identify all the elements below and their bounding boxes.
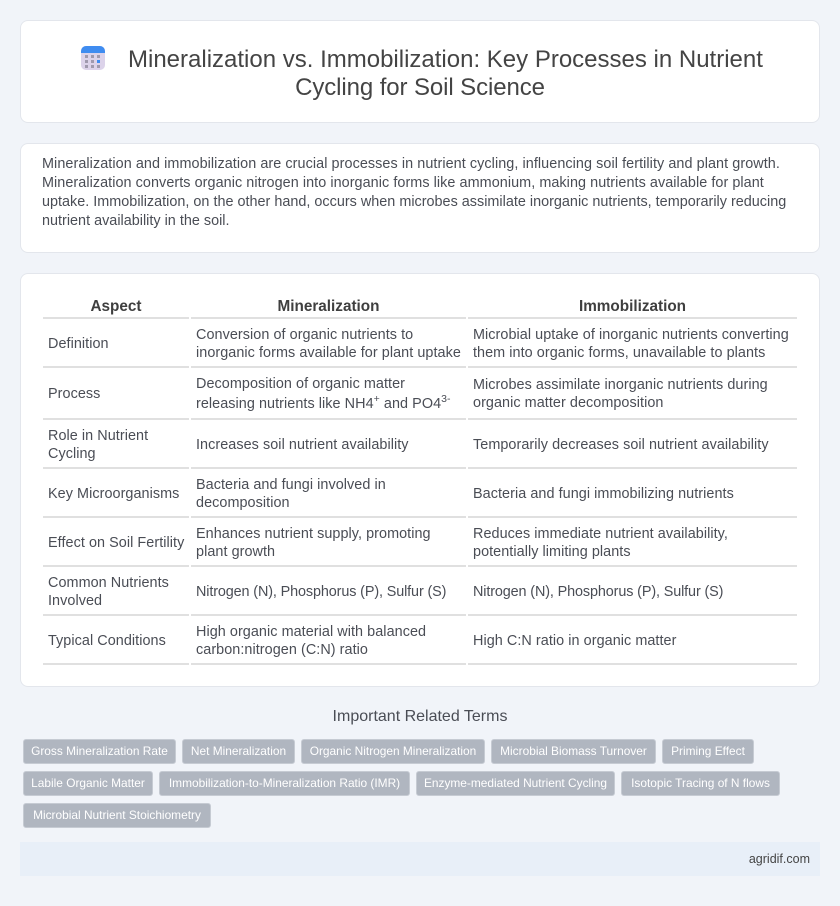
row: Typical Conditions xyxy=(48,624,676,658)
title xyxy=(128,46,763,101)
comparison table xyxy=(43,298,797,665)
row: Typical Conditions: carbon:nitrogen (C:N) ratio xyxy=(196,642,368,658)
row: Common Nutrients Involved: Nitrogen (N), Phosphorus (P), Sulfur (S) xyxy=(196,584,446,600)
text block: intro: Mineralization converts organic nitrogen into inorganic forms like ammonium, making nutrients available for plant xyxy=(42,175,764,191)
row: Key Microorganisms xyxy=(48,477,734,511)
text block: intro: Mineralization and immobilization are crucial processes in nutrient cycling, influencing soil fertility and plant growth. xyxy=(42,156,780,172)
tag list: related terms: Organic Nitrogen Mineralization xyxy=(310,744,476,758)
footer bar xyxy=(20,842,820,876)
row: Process: Decomposition of organic matter xyxy=(196,376,405,392)
tag list: related terms: Labile Organic Matter xyxy=(31,776,145,790)
row: Key Microorganisms: Bacteria and fungi immobilizing nutrients xyxy=(473,486,734,502)
row: Definition: Microbial uptake of inorganic nutrients converting xyxy=(473,327,789,343)
panel: intro description xyxy=(20,143,820,253)
tag list: related terms: Microbial Biomass Turnover xyxy=(500,744,647,758)
row: Effect on Soil Fertility: Enhances nutrient supply, promoting xyxy=(196,526,431,542)
tag list: related terms xyxy=(23,739,780,828)
row: Common Nutrients Involved: Common Nutrients xyxy=(48,575,169,591)
row: Definition xyxy=(48,327,789,361)
row: Common Nutrients Involved xyxy=(48,575,723,609)
row: Effect on Soil Fertility: plant growth xyxy=(196,544,275,560)
row: Effect on Soil Fertility: Reduces immediate nutrient availability, xyxy=(473,526,728,542)
row: Role in Nutrient Cycling xyxy=(48,428,769,462)
footer credit: agridif.com xyxy=(749,852,810,866)
row: Process: organic matter decomposition xyxy=(473,395,663,411)
text block: intro: uptake. Immobilization, on the other hand, occurs when microbes assimilate inorganic nutrients, temporarily reducing xyxy=(42,194,786,210)
row: Key Microorganisms: Bacteria and fungi involved in xyxy=(196,477,386,493)
tag list: related terms: Microbial Nutrient Stoichiometry xyxy=(33,808,201,822)
title: Mineralization vs. Immobilization: Key Processes in Nutrient xyxy=(128,46,763,73)
panel: comparison table card xyxy=(20,273,820,687)
title: Cycling for Soil Science xyxy=(295,74,545,101)
row: Process: Process xyxy=(48,386,100,402)
row: Process: releasing nutrients like NH4+ and PO43- xyxy=(196,393,451,412)
heading: related terms: Important Related Terms xyxy=(333,708,507,725)
tag list: related terms: Priming Effect xyxy=(671,744,745,758)
row: Effect on Soil Fertility: Effect on Soil Fertility xyxy=(48,535,184,551)
row: Common Nutrients Involved: Nitrogen (N), Phosphorus (P), Sulfur (S) xyxy=(473,584,723,600)
row: Typical Conditions: Typical Conditions xyxy=(48,633,166,649)
row: Key Microorganisms: decomposition xyxy=(196,495,290,511)
column heading: Mineralization: Mineralization xyxy=(278,298,380,315)
row: Definition: Definition xyxy=(48,336,109,352)
text block: intro xyxy=(42,156,786,229)
row: Definition: them into organic forms, unavailable to plants xyxy=(473,345,765,361)
row: Key Microorganisms: Key Microorganisms xyxy=(48,486,179,502)
row: Effect on Soil Fertility xyxy=(48,526,728,560)
icon: calendar grid xyxy=(81,46,105,70)
column heading: Aspect: Aspect xyxy=(90,298,142,315)
panel: header card xyxy=(20,20,820,123)
row: Process xyxy=(48,376,768,412)
tag list: related terms: Gross Mineralization Rate xyxy=(31,744,168,758)
row: Role in Nutrient Cycling: Temporarily decreases soil nutrient availability xyxy=(473,437,769,453)
row: Process: Microbes assimilate inorganic nutrients during xyxy=(473,377,768,393)
row: Typical Conditions: High C:N ratio in organic matter xyxy=(473,633,676,649)
row: Role in Nutrient Cycling: Cycling xyxy=(48,446,96,462)
tag list: related terms: Isotopic Tracing of N flows xyxy=(631,776,770,790)
tag list: related terms: Immobilization-to-Mineralization Ratio (IMR) xyxy=(169,776,400,790)
row: Definition: Conversion of organic nutrients to xyxy=(196,327,413,343)
text block: intro: nutrient availability in the soil. xyxy=(42,213,230,229)
row: Definition: inorganic forms available for plant uptake xyxy=(196,345,461,361)
row: Typical Conditions: High organic material with balanced xyxy=(196,624,426,640)
row: Effect on Soil Fertility: potentially limiting plants xyxy=(473,544,631,560)
row: Role in Nutrient Cycling: Role in Nutrient xyxy=(48,428,148,444)
row: Role in Nutrient Cycling: Increases soil nutrient availability xyxy=(196,437,409,453)
column heading: Immobilization: Immobilization xyxy=(579,298,686,315)
tag list: related terms: Net Mineralization xyxy=(191,744,286,758)
tag list: related terms: Enzyme-mediated Nutrient Cycling xyxy=(424,776,607,790)
row: Common Nutrients Involved: Involved xyxy=(48,593,102,609)
